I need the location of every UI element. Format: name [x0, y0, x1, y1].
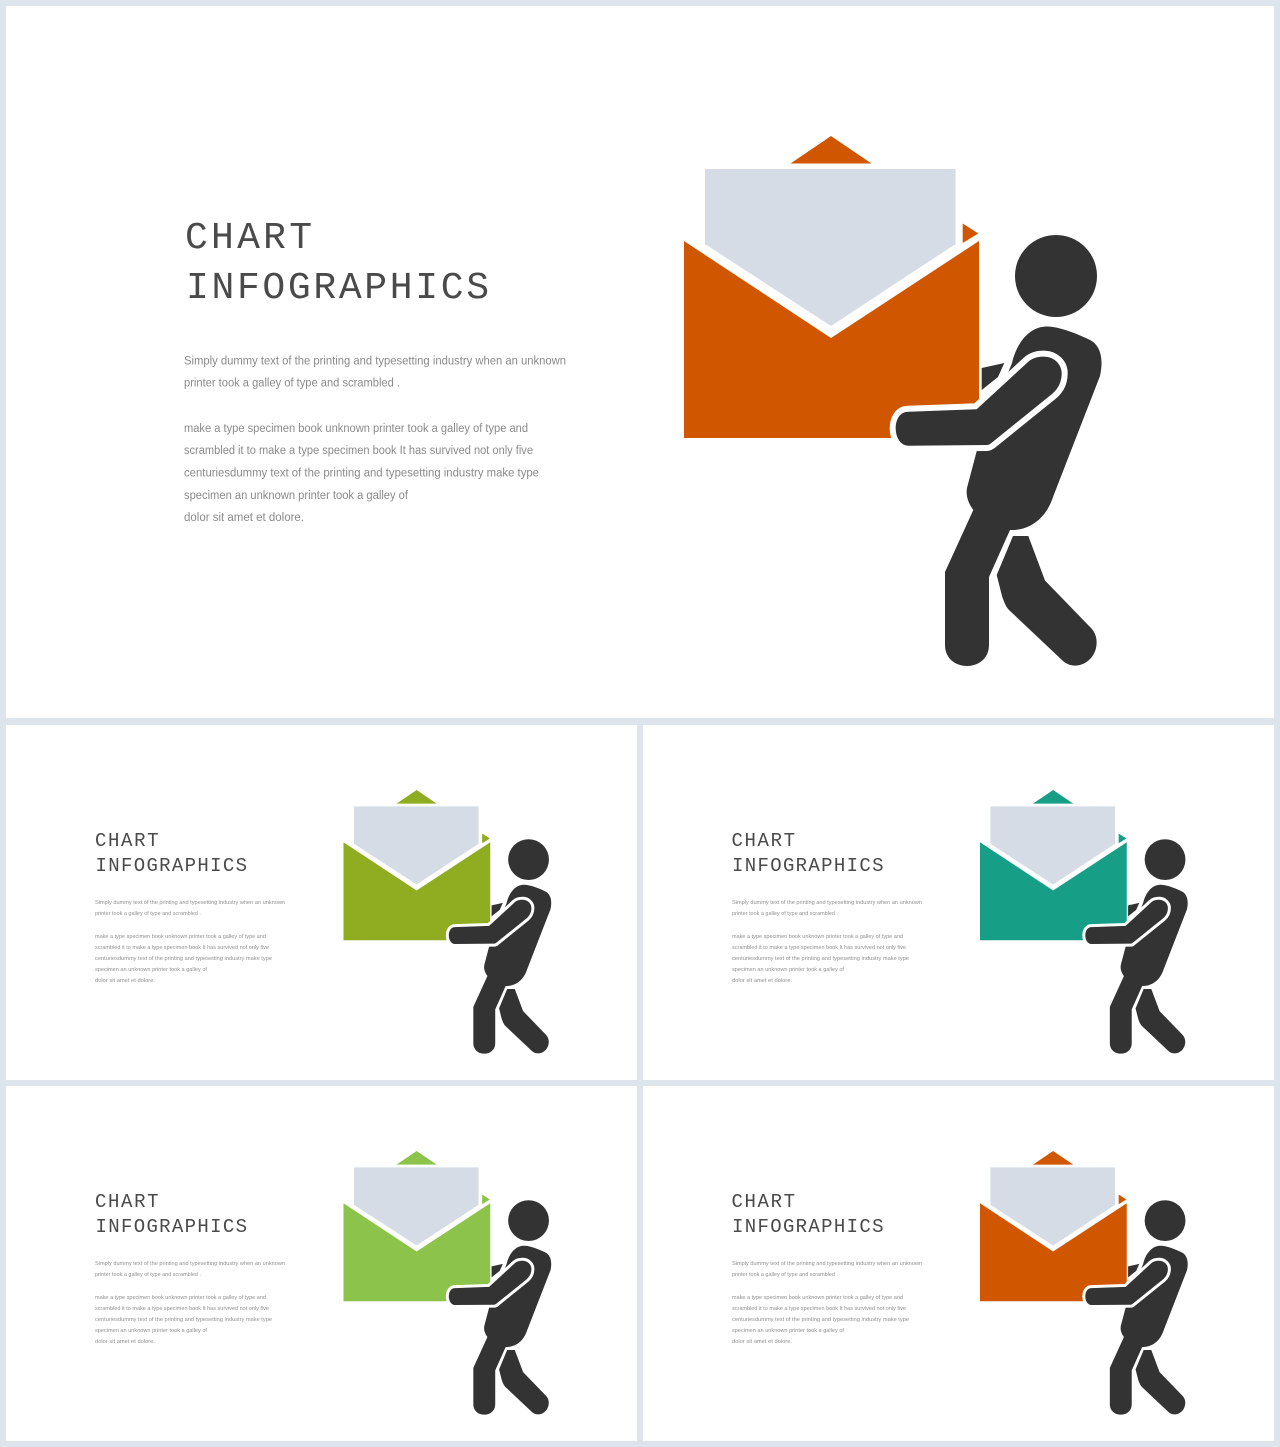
text block: Simply dummy text of the printing and typesetting industry when an unknown	[95, 1261, 285, 1267]
text block: specimen an unknown printer took a galley of	[95, 967, 207, 973]
title	[732, 1191, 884, 1238]
icon: person carrying orange envelope	[684, 136, 1102, 666]
text block: centuriesdummy text of the printing and typesetting industry make type	[184, 468, 539, 480]
text block: make a type specimen book unknown printer took a galley of type and	[732, 934, 903, 940]
title: INFOGRAPHICS	[186, 267, 489, 310]
text block: scrambled it to make a type specimen book It has survived not only five	[184, 445, 533, 457]
text block: scrambled it to make a type specimen book It has survived not only five	[732, 945, 906, 951]
title	[95, 1191, 247, 1238]
text block: dolor sit amet et dolore.	[95, 978, 155, 984]
title	[95, 830, 247, 877]
text block: printer took a galley of type and scrambled .	[95, 1272, 201, 1278]
title: CHART	[185, 217, 312, 260]
text block: printer took a galley of type and scrambled .	[95, 911, 201, 917]
text block: printer took a galley of type and scrambled .	[732, 1272, 838, 1278]
text block: dolor sit amet et dolore.	[732, 1339, 792, 1345]
text block: Simply dummy text of the printing and typesetting industry when an unknown	[184, 356, 566, 368]
title	[732, 830, 884, 877]
icon: person carrying olive envelope	[343, 790, 551, 1054]
panel: small slide, teal	[643, 725, 1274, 1080]
text block: dolor sit amet et dolore.	[732, 978, 792, 984]
text block: make a type specimen book unknown printer took a galley of type and	[732, 1295, 903, 1301]
text block	[184, 356, 566, 524]
panel: small slide, olive green	[6, 725, 637, 1080]
text block: make a type specimen book unknown printer took a galley of type and	[184, 423, 528, 435]
text block	[732, 900, 922, 984]
title: INFOGRAPHICS	[96, 855, 247, 877]
title: INFOGRAPHICS	[96, 1216, 247, 1238]
panel: small slide, light green	[6, 1086, 637, 1441]
text block: centuriesdummy text of the printing and typesetting industry make type	[95, 1317, 272, 1323]
icon: person carrying orange envelope, small	[980, 1151, 1188, 1415]
text block: specimen an unknown printer took a galley of	[95, 1328, 207, 1334]
icon: person carrying light green envelope	[343, 1151, 551, 1415]
title: CHART	[95, 1191, 158, 1213]
text block: dolor sit amet et dolore.	[95, 1339, 155, 1345]
text block	[95, 900, 285, 984]
icon: person carrying teal envelope	[980, 790, 1188, 1054]
text block: Simply dummy text of the printing and typesetting industry when an unknown	[732, 1261, 922, 1267]
text block: centuriesdummy text of the printing and typesetting industry make type	[732, 1317, 909, 1323]
text block: centuriesdummy text of the printing and typesetting industry make type	[95, 956, 272, 962]
text block	[732, 1261, 922, 1345]
title: CHART	[95, 830, 158, 852]
title: CHART	[732, 830, 795, 852]
text block: scrambled it to make a type specimen book It has survived not only five	[95, 945, 269, 951]
text block: specimen an unknown printer took a galley of	[732, 1328, 844, 1334]
text block: Simply dummy text of the printing and typesetting industry when an unknown	[95, 900, 285, 906]
title: INFOGRAPHICS	[732, 1216, 884, 1238]
text block: scrambled it to make a type specimen book It has survived not only five	[95, 1306, 269, 1312]
text block: printer took a galley of type and scrambled .	[184, 378, 400, 390]
title	[185, 217, 489, 310]
text block: printer took a galley of type and scrambled .	[732, 911, 838, 917]
text block: dolor sit amet et dolore.	[184, 512, 304, 524]
title: CHART	[732, 1191, 795, 1213]
text block: centuriesdummy text of the printing and typesetting industry make type	[732, 956, 909, 962]
panel: main slide, orange	[6, 6, 1274, 718]
text block: scrambled it to make a type specimen book It has survived not only five	[732, 1306, 906, 1312]
text block	[95, 1261, 285, 1345]
panel: small slide, orange	[643, 1086, 1274, 1441]
text block: Simply dummy text of the printing and typesetting industry when an unknown	[732, 900, 922, 906]
text block: make a type specimen book unknown printer took a galley of type and	[95, 1295, 266, 1301]
title: INFOGRAPHICS	[732, 855, 884, 877]
text block: specimen an unknown printer took a galley of	[732, 967, 844, 973]
text block: make a type specimen book unknown printer took a galley of type and	[95, 934, 266, 940]
text block: specimen an unknown printer took a galley of	[184, 490, 409, 502]
